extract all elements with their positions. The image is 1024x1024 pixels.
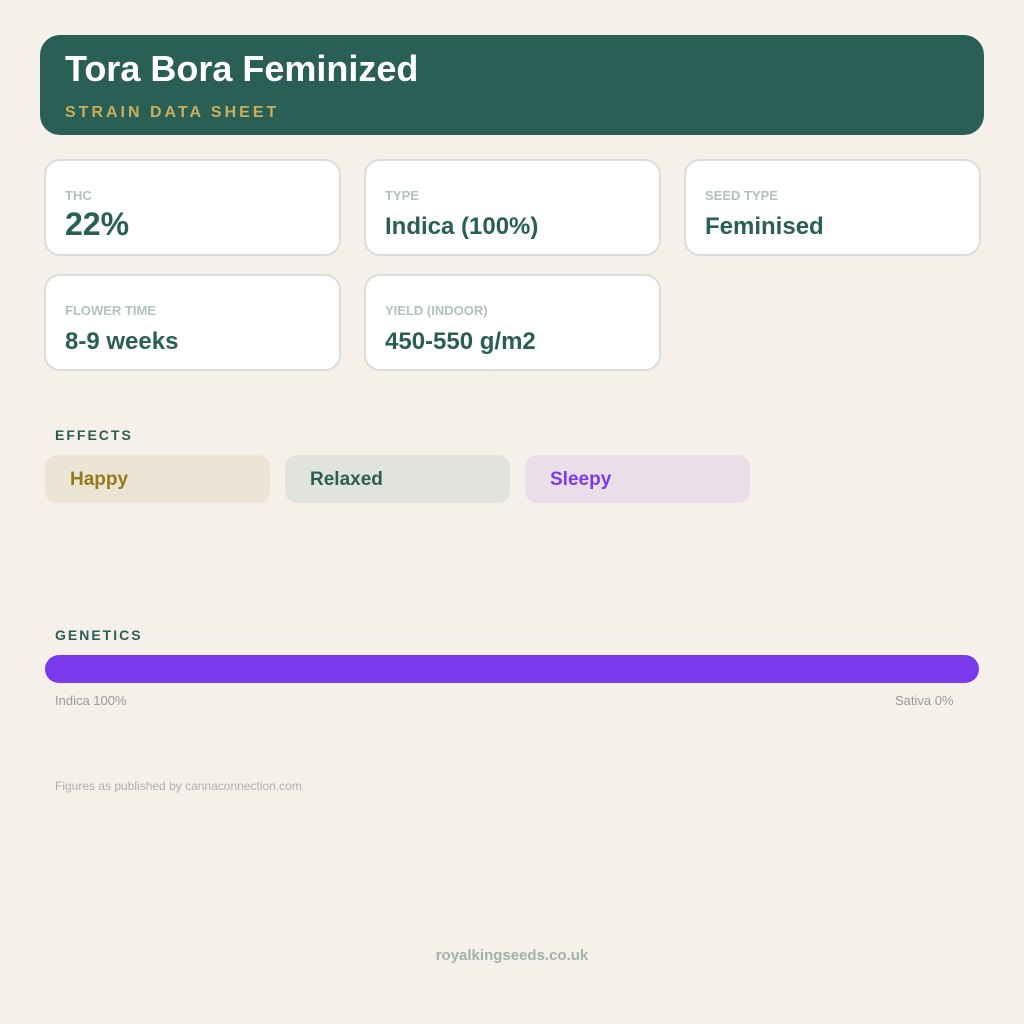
effect pill: sleepy: Sleepy <box>550 469 611 490</box>
effect pill: relaxed: Relaxed <box>310 469 383 490</box>
card: seed type: Feminised <box>705 213 824 240</box>
card: yield <box>364 274 661 371</box>
card: seed type <box>684 159 981 256</box>
card: yield: YIELD (INDOOR) <box>385 303 488 318</box>
card: yield: 450-550 g/m2 <box>385 328 536 355</box>
card: flower time: FLOWER TIME <box>65 303 156 318</box>
footer website: royalkingseeds.co.uk <box>436 947 588 964</box>
effect pill: relaxed <box>285 455 510 503</box>
source note: Figures as published by cannaconnection.com <box>55 779 302 793</box>
genetics bar <box>45 655 979 683</box>
card: seed type: SEED TYPE <box>705 188 778 203</box>
card: THC: THC <box>65 188 92 203</box>
effects heading: EFFECTS <box>55 427 133 443</box>
indica label: Indica 100% <box>55 693 127 708</box>
effect pill: happy <box>45 455 270 503</box>
card: THC: 22% <box>65 206 129 242</box>
card: flower time: 8-9 weeks <box>65 328 178 355</box>
card: type: Indica (100%) <box>385 213 538 240</box>
effect pill: sleepy <box>525 455 750 503</box>
card: THC <box>44 159 341 256</box>
genetics heading: GENETICS <box>55 627 143 643</box>
title: Tora Bora Feminized <box>65 48 418 89</box>
card: flower time <box>44 274 341 371</box>
header banner <box>40 35 984 135</box>
subtitle: STRAIN DATA SHEET <box>65 104 279 121</box>
card: type <box>364 159 661 256</box>
effect pill: happy: Happy <box>70 469 128 490</box>
card: type: TYPE <box>385 188 419 203</box>
sativa label: Sativa 0% <box>895 693 954 708</box>
